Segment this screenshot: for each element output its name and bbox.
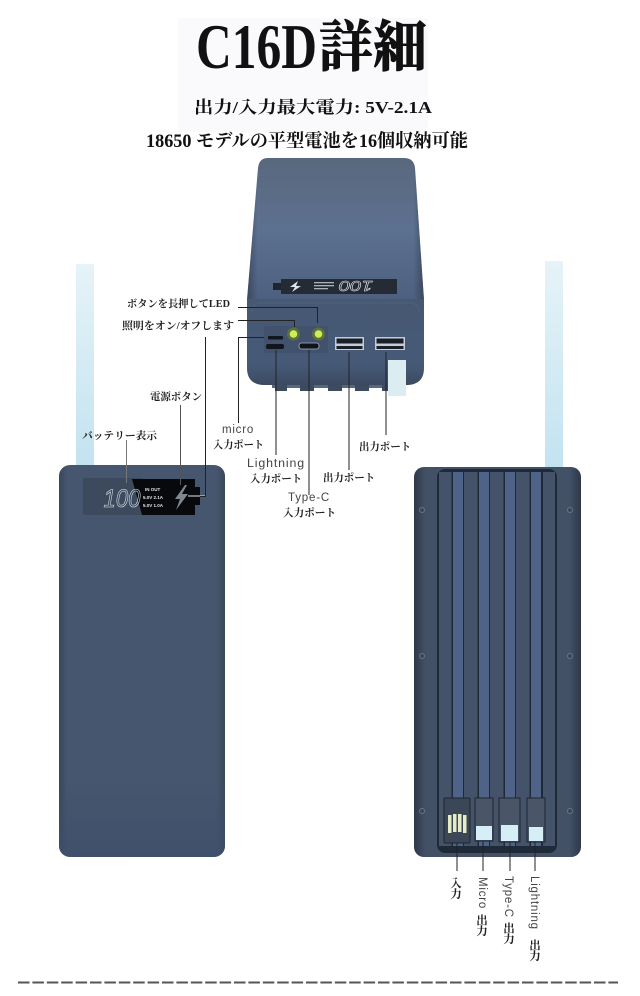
LED right: [312, 328, 325, 340]
label: micro output: [476, 841, 488, 938]
label: micro input: [213, 338, 264, 451]
label: button connector line: [200, 337, 206, 496]
output specs: 5.0V 2.1A: [143, 495, 164, 500]
label: LED long press: [127, 297, 318, 323]
output specs: 5.0V 1.0A: [143, 503, 164, 508]
label: LED long press: ボタンを長押してLED: [127, 297, 230, 310]
bolt icon: [175, 485, 188, 510]
label: lightning output: Lightning: [528, 876, 540, 930]
front face: [247, 299, 424, 385]
title: C16D: [196, 12, 317, 82]
screws: [420, 508, 572, 814]
label: lightning input: [247, 350, 305, 485]
label: input: [450, 843, 462, 901]
label: type-c input: 入力ポート: [283, 506, 336, 519]
right cable strap: [545, 261, 563, 468]
label: micro output: 力: [476, 924, 488, 938]
subtitle: battery capacity: 18650 モデルの平型電池を16個収納可能: [146, 130, 468, 152]
bottom ridges: [272, 380, 388, 391]
battery digits: 100: [104, 485, 141, 513]
subtitle: max power: 出力/入力最大電力: 5V-2.1A: [194, 97, 433, 117]
label: micro input: 入力ポート: [213, 438, 264, 451]
inner recessed panel: [437, 469, 557, 853]
lightning connector: [527, 798, 545, 842]
USB port 2: [375, 337, 405, 350]
cable channels: [439, 472, 555, 846]
label: type-c output: Type-C: [502, 876, 514, 918]
title: [196, 12, 427, 82]
label: micro output: 出: [476, 913, 488, 927]
label: output port 2: 出力ポート: [359, 440, 411, 453]
label: lightning output: [528, 842, 541, 963]
left cable strap: [76, 264, 94, 466]
label: lightning input: 入力ポート: [250, 472, 302, 485]
label: lightning input: Lightning: [247, 458, 305, 470]
label: type-c input: [283, 350, 336, 519]
label: output port 1: 出力ポート: [323, 471, 375, 484]
title: 詳細: [319, 17, 427, 78]
display panel: [83, 478, 206, 515]
label: light on off: 照明をオン/オフします: [122, 320, 234, 332]
output specs: IN OUT: [145, 487, 161, 492]
micro connector: [475, 798, 493, 841]
label: type-c input: Type-C: [288, 492, 330, 504]
label: input: 入: [450, 877, 462, 890]
label: micro input: micro: [222, 424, 254, 436]
type-c port: [299, 343, 319, 349]
label: light on off: [122, 320, 294, 332]
label: battery display: [82, 429, 159, 483]
label: power button: [150, 390, 202, 485]
connector highlight: [188, 496, 206, 497]
label: lightning output: 出: [529, 938, 541, 952]
top display: [273, 277, 397, 294]
label: output port 1: [323, 352, 375, 484]
label: output port 2: [359, 352, 411, 453]
label: type-c output: [502, 842, 515, 946]
LED left: [287, 328, 300, 340]
faint header panel: [178, 18, 428, 132]
top face: [247, 158, 424, 300]
recessed port panel: [264, 326, 328, 353]
label: lightning output: 力: [529, 949, 541, 963]
lightning port: [266, 344, 284, 349]
label: micro output: Micro: [476, 877, 488, 909]
USB port 1: [335, 337, 364, 350]
power bank: top view: [247, 158, 424, 396]
micro port: [268, 336, 283, 340]
USB connector: [444, 798, 470, 843]
label: battery display: バッテリー表示: [82, 429, 159, 442]
power bank: front left: [59, 465, 225, 857]
label: type-c output: 出: [503, 921, 515, 935]
type-c connector: [499, 798, 520, 842]
dashed divider: [18, 982, 618, 984]
cable strap end: [388, 360, 406, 396]
label: type-c output: 力: [503, 932, 515, 946]
output specs: [143, 487, 164, 508]
power bank: back right: [414, 467, 581, 857]
label: power button: 電源ボタン: [150, 390, 202, 403]
label: input: 力: [450, 887, 462, 901]
top display: 100: [338, 277, 373, 294]
